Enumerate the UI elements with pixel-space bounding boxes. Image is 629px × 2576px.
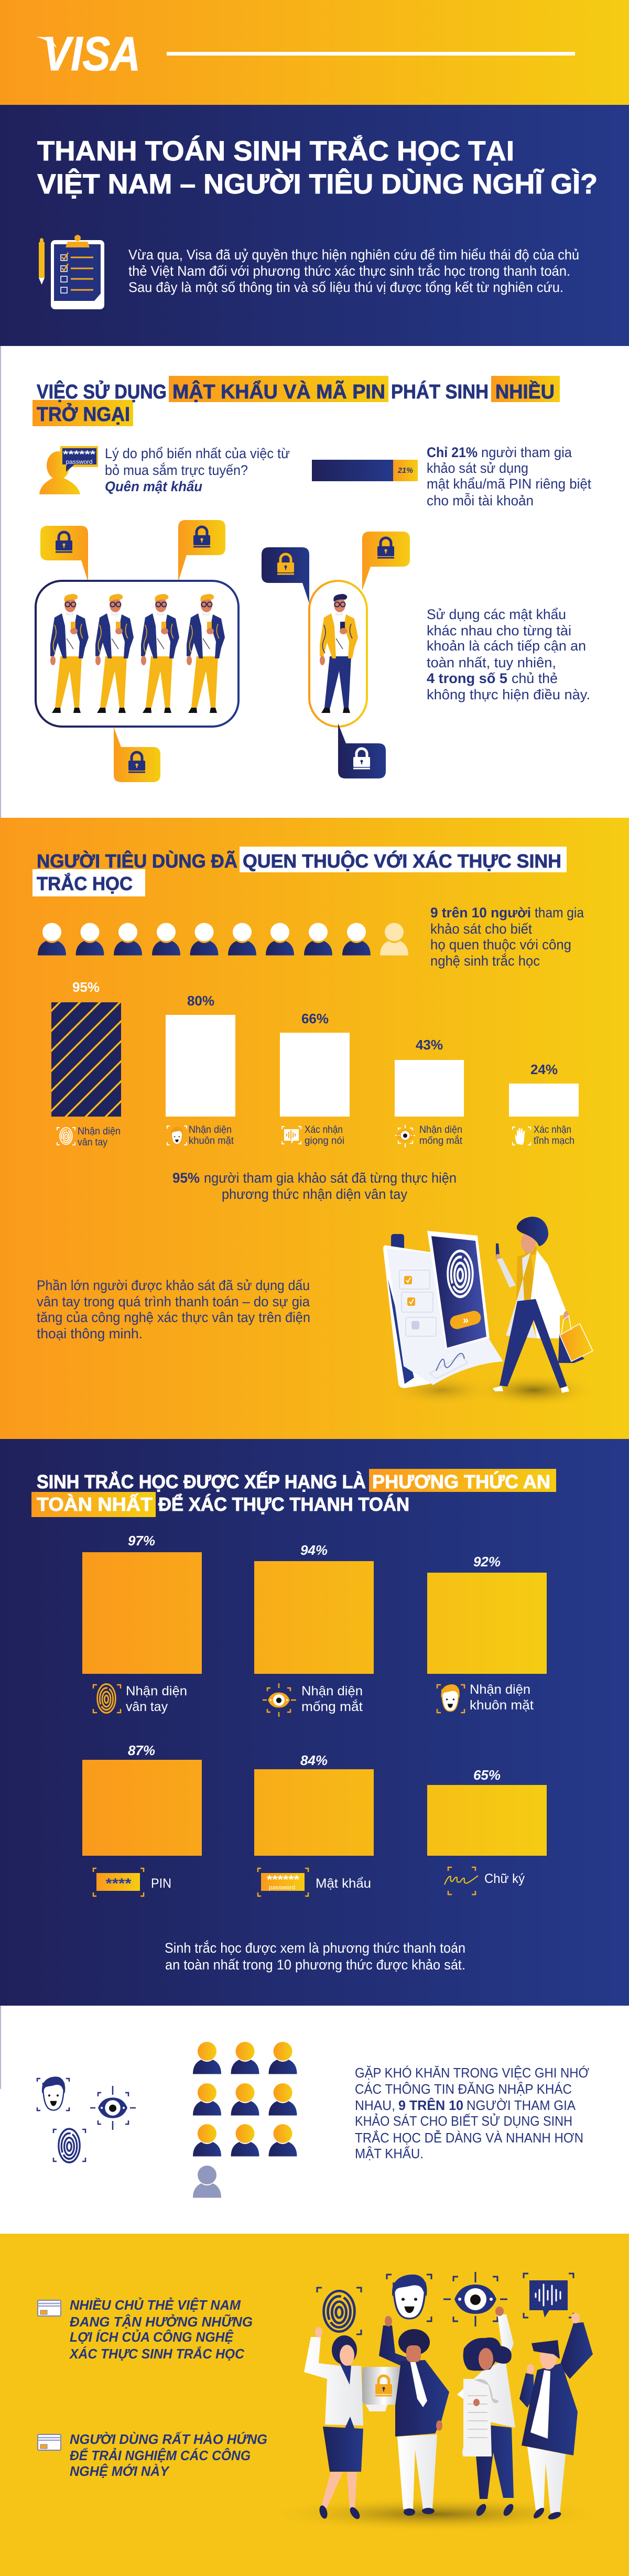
- icon: card 1: [38, 2300, 61, 2316]
- label: iris: Nhận diện: [419, 1124, 462, 1135]
- heading: TRẮC HỌC: [37, 872, 133, 894]
- text: different passwords: không thực hiện điều này.: [427, 687, 590, 702]
- text: 95% used fingerprint: người tham gia khảo sát đã từng thực hiện: [204, 1170, 457, 1186]
- heading: PHƯƠNG THỨC AN: [372, 1470, 550, 1492]
- panel: intro: [0, 105, 629, 346]
- icon grid: 9 of 10 people: [193, 2042, 297, 2198]
- text: different passwords: Sử dụng các mật khẩu: [427, 607, 566, 622]
- text: different passwords: chủ thẻ: [512, 670, 558, 686]
- icon: iris scan: [90, 2086, 136, 2130]
- icon: card 2: [38, 2434, 61, 2450]
- text: easier than passwords: CÁC THÔNG TIN ĐĂNG NHẬP KHÁC: [355, 2081, 572, 2097]
- label: fingerprint: [93, 1684, 187, 1714]
- text: different passwords: khoản là cách tiếp cận an: [427, 638, 586, 654]
- label: voice: Xác nhận: [305, 1124, 343, 1135]
- label: face: [167, 1124, 234, 1146]
- icon: person with password bubble: password: [66, 458, 92, 466]
- text: fingerprint growth: Phần lớn người được khảo sát đã sử dụng dấu: [37, 1278, 310, 1293]
- label: password: ******: [267, 1873, 300, 1886]
- label: voice: [282, 1124, 344, 1146]
- label: face: Nhận diện: [189, 1124, 232, 1135]
- label: iris: mống mắt: [419, 1135, 463, 1146]
- panel: familiar with biometrics: [0, 818, 629, 1439]
- panel: passwords and PINs: [0, 346, 629, 818]
- chart: familiarity bars: 43%: [416, 1037, 443, 1053]
- intro text: Vừa qua, Visa đã uỷ quyền thực hiện nghiên cứu để tìm hiểu thái độ của chủ: [128, 247, 579, 263]
- text: users excited: NGHỆ MỚI NÀY: [70, 2463, 170, 2479]
- text: different passwords: [427, 607, 590, 702]
- panel: safest methods: [0, 1439, 629, 2006]
- label: fingerprint: vân tay: [78, 1137, 107, 1148]
- icon: fingerprint: [317, 2288, 361, 2334]
- label: PIN: ****: [106, 1875, 132, 1891]
- text: cardholders enjoying benefits: [69, 2297, 253, 2362]
- text: safest of 10 methods: Sinh trắc học được xem là phương thức thanh toán: [165, 1940, 465, 1956]
- chart: familiarity bars: 95%: [72, 979, 100, 995]
- icon: clipboard and pencil: [39, 235, 104, 309]
- text: 9 of 10: khảo sát cho biết: [430, 921, 532, 937]
- intro text: thẻ Việt Nam đối với phương thức xác thực sinh trắc học trong thanh toán.: [128, 263, 570, 279]
- callout: lock 5: [362, 532, 410, 590]
- icon: voice: [524, 2274, 573, 2318]
- text: 9 of 10: [430, 905, 584, 969]
- title: THANH TOÁN SINH TRẮC HỌC TẠI: [37, 135, 514, 167]
- illustration: phone with fingerprint and shopper: [383, 1217, 594, 1407]
- label: voice: giọng nói: [305, 1135, 344, 1146]
- figure: man in long coat: [519, 2313, 593, 2521]
- chart: 21% bar: 21%: [397, 466, 413, 475]
- heading: [31, 1469, 556, 1517]
- label: face: Nhận diện: [470, 1682, 530, 1697]
- figure: person 4: [187, 594, 225, 713]
- label: PIN: [93, 1868, 171, 1896]
- chart: safety bars row 1: 94%: [300, 1542, 328, 1558]
- callout: lock 6: [338, 723, 386, 778]
- text: users excited: NGƯỜI DÙNG RẤT HÀO HỨNG: [70, 2431, 267, 2447]
- panel: easier and faster: [0, 2006, 629, 2234]
- text: only 21%: khảo sát sử dụng: [427, 460, 528, 476]
- text: only 21%: người tham gia: [481, 445, 572, 460]
- text: only 21%: Chỉ 21%: [427, 445, 478, 460]
- panel: header band: [0, 0, 629, 105]
- chart: safety bars row 2: 84%: [300, 1752, 328, 1768]
- label: vein: Xác nhận: [534, 1124, 571, 1135]
- heading: QUEN THUỘC VỚI XÁC THỰC SINH: [243, 850, 561, 872]
- text: 95% used fingerprint: 95%: [172, 1170, 200, 1186]
- title: VIỆT NAM – NGƯỜI TIÊU DÙNG NGHĨ GÌ?: [37, 168, 598, 200]
- callout: lock 2: [178, 520, 225, 582]
- heading: ĐỂ XÁC THỰC THANH TOÁN: [158, 1493, 409, 1515]
- icon: person with password bubble: [39, 446, 98, 494]
- text: different passwords: khác nhau cho từng tài: [427, 623, 571, 638]
- label: iris: Nhận diện: [301, 1684, 363, 1698]
- text: 9 of 10: tham gia: [535, 905, 584, 921]
- text: fingerprint growth: thoại thông minh.: [37, 1326, 143, 1341]
- text: easier than passwords: MẬT KHẨU.: [355, 2146, 424, 2161]
- text: fingerprint growth: [37, 1278, 310, 1341]
- text: users excited: [70, 2431, 267, 2479]
- text: easier than passwords: [355, 2065, 589, 2161]
- heading: MẬT KHẨU VÀ MÃ PIN: [172, 380, 385, 403]
- chart: familiarity bars: [51, 979, 579, 1117]
- heading: PHÁT SINH: [391, 380, 489, 403]
- label: face: [437, 1682, 534, 1713]
- text: different passwords: toàn nhất, tuy nhiên,: [427, 655, 556, 670]
- label: iris: [263, 1683, 363, 1717]
- label: fingerprint: [57, 1126, 121, 1148]
- chart: safety bars row 1: [82, 1533, 547, 1674]
- callout: lock 1: [40, 526, 88, 582]
- chart: safety bars row 2: 65%: [473, 1767, 501, 1783]
- text: users excited: ĐỂ TRẢI NGHIỆM CÁC CÔNG: [70, 2448, 251, 2463]
- heading: VIỆC SỬ DỤNG: [37, 380, 167, 403]
- figure: woman with receipt: [457, 2307, 515, 2518]
- chart: safety bars row 2: 87%: [128, 1742, 155, 1758]
- chart: safety bars row 1: 92%: [473, 1554, 501, 1570]
- text: easier than passwords: TRẮC HỌC DỄ DÀNG VÀ NHANH HƠN: [355, 2130, 583, 2146]
- text: 9 of 10: họ quen thuộc với công: [430, 937, 571, 953]
- label: signature: [444, 1867, 525, 1895]
- figure: person 3: [141, 594, 179, 713]
- text: easier than passwords: 9 TRÊN 10: [398, 2097, 463, 2113]
- figure: person 2: [95, 594, 134, 713]
- chart: familiarity bars: 80%: [187, 993, 214, 1009]
- figure: person 1: [50, 594, 89, 713]
- label: password: password: [269, 1885, 295, 1891]
- label: signature: Chữ ký: [484, 1871, 525, 1886]
- text: 9 of 10: nghệ sinh trắc học: [430, 953, 540, 969]
- heading: NGƯỜI TIÊU DÙNG ĐÃ: [37, 850, 237, 872]
- label: iris: mống mắt: [301, 1699, 363, 1714]
- icon: face scan: [37, 2076, 69, 2110]
- logo: VISA: VISA: [43, 27, 140, 81]
- icon: eye: [443, 2272, 507, 2326]
- text: cardholders enjoying benefits: ĐANG TẬN HƯỞNG NHỮNG: [70, 2314, 253, 2330]
- chart: familiarity bars: 66%: [301, 1011, 329, 1026]
- label: vein: tĩnh mạch: [534, 1135, 574, 1146]
- label: password: Mật khẩu: [316, 1876, 371, 1891]
- illustration: phone with fingerprint and shopper: »: [463, 1315, 469, 1326]
- frame: single person: [309, 581, 367, 727]
- label: iris: [395, 1124, 463, 1148]
- chart: safety bars row 2: [82, 1742, 547, 1856]
- callout: lock 4: [262, 547, 309, 603]
- heading: SINH TRẮC HỌC ĐƯỢC XẾP HẠNG LÀ: [37, 1470, 366, 1492]
- heading: [32, 376, 560, 426]
- text: 95% used fingerprint: phương thức nhận diện vân tay: [222, 1186, 407, 1202]
- figure: man in suit: [379, 2316, 449, 2516]
- panel: closing: [0, 2234, 629, 2576]
- heading: [32, 847, 567, 896]
- heading: TRỞ NGẠI: [37, 403, 130, 426]
- text: 95% used fingerprint: [172, 1170, 457, 1202]
- label: PIN: PIN: [151, 1876, 171, 1891]
- figure: woman with lock: [304, 2327, 405, 2521]
- figure: person with unique passwords: [320, 594, 358, 713]
- icon: face: [387, 2275, 431, 2321]
- heading: NHIỀU: [495, 380, 555, 403]
- text: different passwords: 4 trong số 5: [427, 670, 507, 686]
- callout: lock 3: [114, 727, 160, 782]
- label: face: khuôn mặt: [470, 1698, 534, 1713]
- title: [37, 135, 598, 200]
- text: easier than passwords: NGƯỜI THAM GIA: [467, 2097, 576, 2113]
- label: fingerprint: vân tay: [126, 1700, 168, 1714]
- text: easier than passwords: KHẢO SÁT CHO BIẾT SỬ DỤNG SINH: [355, 2113, 572, 2129]
- illustration: four people with biometric icons: [262, 2272, 608, 2532]
- text: safest of 10 methods: an toàn nhất trong 10 phương thức được khảo sát.: [165, 1957, 465, 1973]
- text: safest of 10 methods: [165, 1940, 465, 1973]
- chart: 21% bar: [312, 460, 418, 481]
- icon row: 9 of 10 people: [38, 923, 408, 955]
- label: fingerprint: Nhận diện: [126, 1684, 187, 1698]
- heading: TOÀN NHẤT: [37, 1493, 153, 1515]
- text: common reason: Quên mật khẩu: [105, 479, 202, 494]
- text: fingerprint growth: tăng của công nghệ xác thực vân tay trên điện: [37, 1309, 310, 1325]
- text: only 21%: cho mỗi tài khoản: [427, 492, 534, 508]
- text: cardholders enjoying benefits: XÁC THỰC SINH TRẮC HỌC: [69, 2346, 245, 2362]
- icon: person with password bubble: ******: [63, 449, 96, 460]
- text: 9 of 10: 9 trên 10 người: [430, 905, 531, 921]
- text: easier than passwords: GẶP KHÓ KHĂN TRONG VIỆC GHI NHỚ: [355, 2065, 589, 2081]
- group frame: four people: [36, 581, 238, 727]
- text: common reason: [105, 446, 290, 494]
- label: password: [258, 1868, 371, 1896]
- icon: fingerprint scan: [53, 2129, 85, 2162]
- chart: safety bars row 1: 97%: [128, 1533, 155, 1549]
- text: cardholders enjoying benefits: LỢI ÍCH CỦA CÔNG NGHỆ: [70, 2329, 234, 2345]
- label: fingerprint: Nhận diện: [78, 1126, 121, 1137]
- intro text: Sau đây là một số thông tin và số liệu thú vị được tổng kết từ nghiên cứu.: [128, 279, 563, 295]
- header rule: [167, 52, 575, 56]
- text: easier than passwords: NHAU,: [355, 2097, 395, 2113]
- text: cardholders enjoying benefits: NHIỀU CHỦ THẺ VIỆT NAM: [70, 2297, 241, 2313]
- label: face: khuôn mặt: [189, 1135, 234, 1146]
- text: fingerprint growth: vân tay trong quá trình thanh toán – do sự gia: [37, 1294, 310, 1309]
- text: common reason: bỏ mua sắm trực tuyến?: [105, 462, 248, 478]
- label: vein: [513, 1124, 574, 1146]
- text: only 21%: [427, 445, 591, 508]
- text: common reason: Lý do phổ biến nhất của việc từ: [105, 446, 290, 461]
- intro text: [128, 247, 579, 295]
- chart: familiarity bars: 24%: [530, 1062, 558, 1077]
- text: only 21%: mật khẩu/mã PIN riêng biệt: [427, 476, 591, 492]
